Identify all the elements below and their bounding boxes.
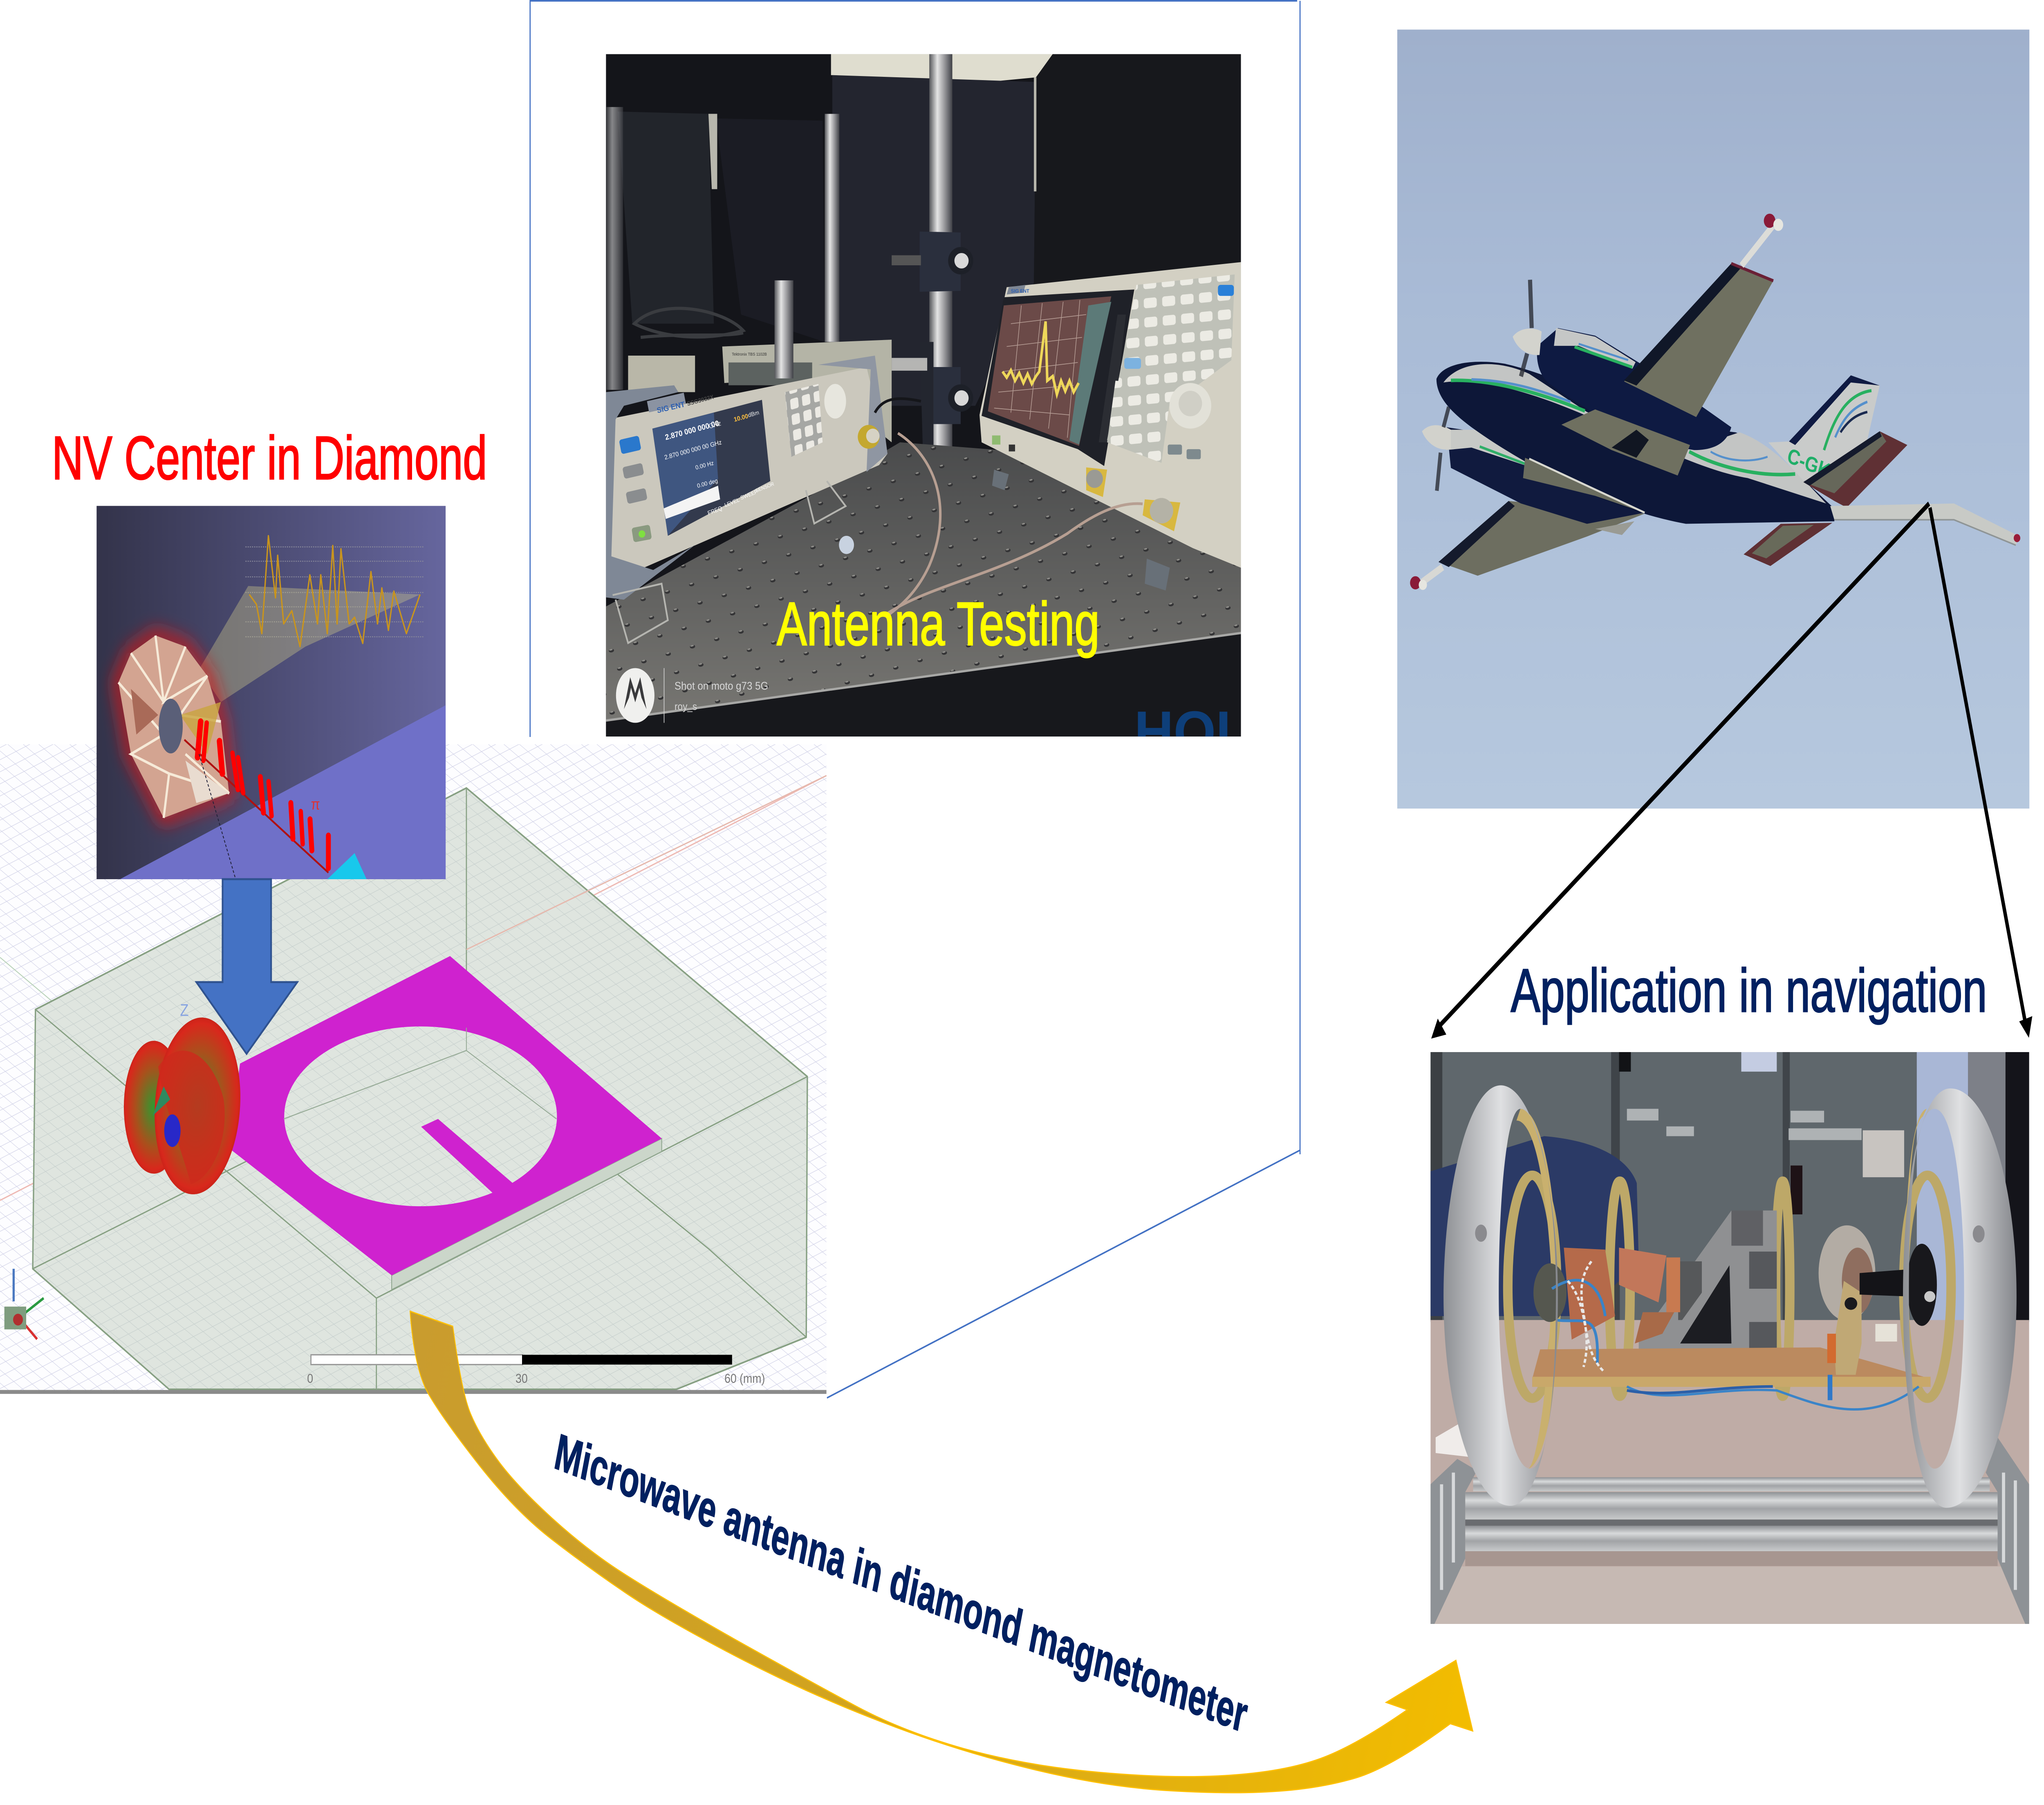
tail fin: C-GK bbox=[1785, 444, 1833, 484]
watermark: camera logo: Shot on moto g73 5G bbox=[675, 680, 768, 692]
photo: magnetometer gimbal instrument bbox=[1430, 1052, 2029, 1624]
antenna substrate bbox=[392, 1138, 662, 1290]
panel: antenna testing callout bracket bbox=[530, 1, 1300, 1398]
heading: Application in navigation: Application in navigation bbox=[1511, 956, 1987, 1025]
arrow: boom to application, left bbox=[1431, 504, 1929, 1039]
spectrum analyzer bbox=[979, 262, 1241, 591]
microwave pulse train: π bbox=[311, 796, 320, 813]
photo: antenna testing bench bbox=[606, 54, 1249, 765]
waveform bbox=[199, 536, 423, 702]
title: NV Center in Diamond: NV Center in Diamond bbox=[52, 424, 487, 492]
signal generator: FREQ bbox=[707, 504, 723, 517]
signal generator: dBm bbox=[747, 409, 760, 419]
aluminium sensor bracket bbox=[1639, 1211, 1777, 1363]
arrow: blue down arrow bbox=[196, 879, 297, 1054]
panel: antenna simulation scene bbox=[0, 744, 827, 1394]
watermark: camera logo: roy_s bbox=[675, 701, 697, 712]
signal generator: 10.00 bbox=[733, 412, 749, 423]
signal generator: GHz bbox=[708, 419, 722, 430]
mounting post and clamps bbox=[892, 54, 975, 488]
radiation pattern: Z bbox=[180, 1001, 189, 1020]
signal generator: SSG3032X bbox=[686, 393, 715, 407]
connector and wiring harness bbox=[1533, 1261, 1919, 1409]
coaxial cables bbox=[875, 399, 1143, 616]
tail fin bbox=[1768, 375, 1880, 484]
optical table: HOL bbox=[1134, 699, 1249, 765]
microwave pulse train bbox=[184, 721, 328, 873]
signal generator: SENSOR bbox=[755, 481, 775, 494]
axis triad bbox=[4, 1269, 44, 1339]
signal generator bbox=[606, 356, 888, 643]
scale bar: 0 bbox=[307, 1371, 313, 1386]
air box bbox=[33, 775, 827, 1389]
photo: antenna testing bench: Tektronix TBS 1102B bbox=[732, 352, 767, 357]
fuselage bbox=[1437, 362, 1834, 524]
inner brass rings bbox=[1508, 1175, 1951, 1398]
scale bar bbox=[307, 1355, 765, 1386]
rotating sensor head bbox=[1819, 1225, 1937, 1375]
spectrum analyzer: SIG ENT bbox=[1011, 289, 1030, 294]
radiation pattern bbox=[124, 1001, 247, 1198]
scale bar: 30 bbox=[515, 1371, 528, 1386]
antenna patch bbox=[229, 956, 662, 1275]
tail stabilizers bbox=[1744, 431, 1907, 566]
near wing bbox=[1561, 214, 1783, 475]
arrow: curved gold arrow to application bbox=[410, 1311, 1473, 1793]
photo: survey aircraft with tail boom bbox=[1397, 29, 2029, 808]
signal generator: 0.00 Hz bbox=[695, 459, 714, 471]
signal generator: 2.870 000 000 00 bbox=[664, 419, 720, 442]
laser beam bbox=[327, 853, 367, 879]
optical table bbox=[606, 442, 1249, 765]
label: Antenna Testing: Antenna Testing bbox=[777, 590, 1100, 658]
signal generator: LEVEL bbox=[724, 497, 740, 508]
arrow: boom to application, right bbox=[1930, 508, 2032, 1038]
lower wing and engine bbox=[1410, 407, 1645, 590]
baseplate bbox=[1532, 1347, 1931, 1386]
scale bar: 60 (mm) bbox=[724, 1371, 765, 1386]
watermark: camera logo bbox=[616, 668, 768, 723]
copper thermal straps bbox=[1564, 1247, 1674, 1344]
signal generator: 2.870 000 000 00 GHz bbox=[664, 439, 722, 461]
extrusion base frame bbox=[1430, 1438, 2029, 1624]
near engine bbox=[1513, 280, 1731, 450]
diamond bbox=[119, 636, 229, 818]
large Helmholtz rings bbox=[1443, 1085, 2017, 1508]
magnetometer tail boom bbox=[1830, 504, 2020, 545]
signal generator: 0.00 deg bbox=[696, 477, 718, 489]
panel: NV center diagram bbox=[96, 506, 446, 879]
signal generator: SWEEP bbox=[740, 488, 758, 501]
signal generator: SIG ENT bbox=[656, 400, 686, 415]
label: Microwave antenna in diamond magnetometer: Microwave antenna in diamond magnetometer bbox=[551, 1422, 1252, 1743]
